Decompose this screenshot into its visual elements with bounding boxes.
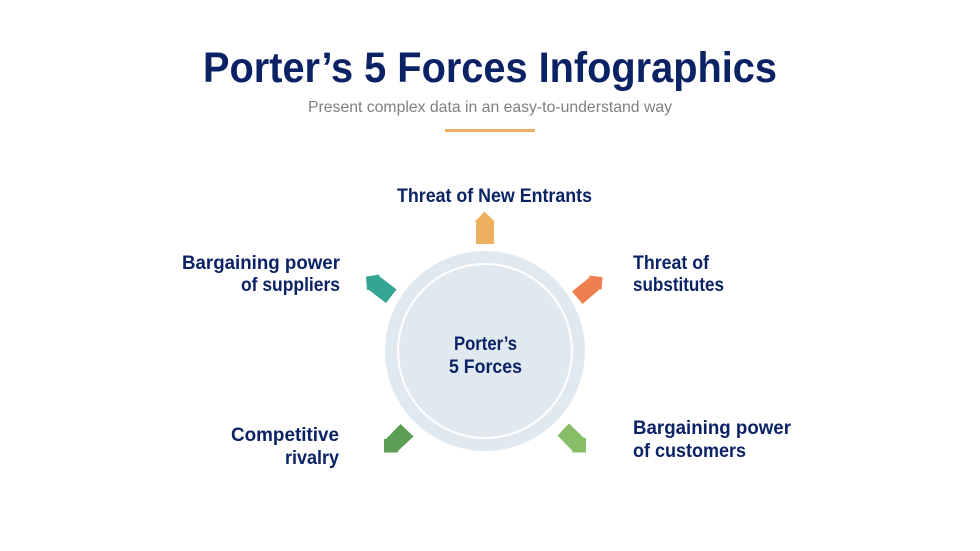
label: threat of substitutes: substitutes xyxy=(633,275,724,296)
label: bargaining power of suppliers: Bargaining power xyxy=(182,253,341,274)
label: bargaining power of customers xyxy=(633,418,792,462)
title accent line xyxy=(445,129,535,132)
label: bargaining power of suppliers xyxy=(182,253,341,296)
arrow: bargaining power of customers xyxy=(558,424,586,452)
label: bargaining power of customers: Bargaining power xyxy=(633,418,792,439)
label: threat of substitutes xyxy=(633,253,724,296)
central circle: Porter’s xyxy=(454,334,517,355)
label: bargaining power of customers: of customers xyxy=(633,441,746,462)
subtitle: Present complex data in an easy-to-understand way xyxy=(308,99,672,116)
label: competitive rivalry xyxy=(231,425,339,469)
label: threat of new entrants: Threat of New Entrants xyxy=(397,186,592,207)
central circle: 5 Forces xyxy=(449,357,522,378)
label: bargaining power of suppliers: of suppliers xyxy=(241,275,340,296)
arrow: competitive rivalry xyxy=(384,424,414,452)
arrow: threat of substitutes xyxy=(572,276,602,304)
label: threat of substitutes: Threat of xyxy=(633,253,710,274)
label: competitive rivalry: Competitive xyxy=(231,425,339,446)
arrow: bargaining power of suppliers xyxy=(366,274,396,303)
title: Porter’s 5 Forces Infographics xyxy=(203,44,777,92)
central circle xyxy=(385,251,585,451)
label: competitive rivalry: rivalry xyxy=(285,448,339,469)
arrow: threat of new entrants xyxy=(474,212,495,244)
